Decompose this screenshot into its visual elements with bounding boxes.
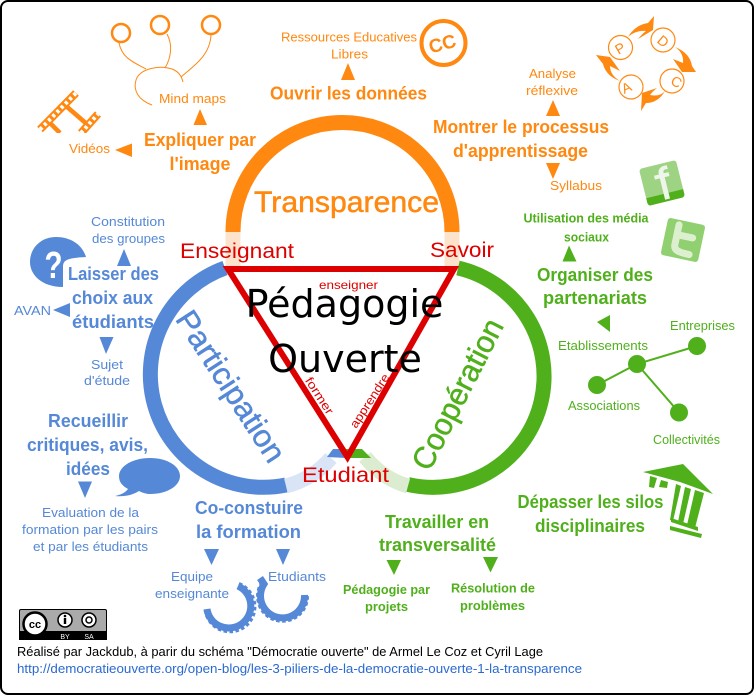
- heading: Organiser des partenariats: partenariats: [543, 288, 647, 308]
- credit text: Réalisé par Jackdub, à parir du schéma "Démocratie ouverte" de Armel Le Coz et Cyril Lage: [17, 645, 543, 659]
- text: Constitution des groupes: Constitution: [91, 215, 165, 229]
- heading: Dépasser les silos disciplinaires: [518, 492, 664, 536]
- title: Pédagogie Ouverte: [246, 282, 443, 381]
- icon: twitter: [660, 217, 706, 263]
- text: Ressources Educatives Libres: Libres: [331, 48, 368, 62]
- icon: speech bubble: [115, 458, 180, 496]
- red triangle: [228, 269, 454, 457]
- text: Evaluation de la formation: formation par les pairs: [22, 523, 158, 537]
- pillar heading: Transparence: Transparence: [254, 186, 439, 219]
- icon: facebook: [639, 160, 685, 206]
- triangle edge labels: enseigner: [319, 278, 378, 292]
- triangle vertex labels: [180, 239, 494, 487]
- pillar heading: Participation: Participation: [169, 304, 293, 469]
- text: Syllabus: Syllabus: [550, 179, 602, 193]
- arrow: to sujet: [100, 337, 114, 354]
- badge: CC BY-SA: SA: [84, 634, 94, 641]
- text: Utilisation des média sociaux: sociaux: [564, 230, 609, 244]
- arrow: to analyse: [546, 100, 560, 116]
- ring: transparence arc: [233, 122, 452, 267]
- arrow: to ressources: [341, 63, 355, 80]
- heading: Co-construire la formation: Co-constuire: [195, 498, 303, 518]
- icon: PDCA cycle: P: [612, 39, 628, 57]
- ring: participation arc: [150, 268, 346, 487]
- heading: Organiser des partenariats: [537, 265, 653, 308]
- text: Pédagogie par projets: Pédagogie par: [343, 583, 430, 597]
- text: Sujet d'étude: [84, 358, 130, 388]
- arrows: to equipe and etudiants: [204, 549, 290, 565]
- text: Pédagogie par projets: [343, 583, 430, 614]
- text: Evaluation de la formation: et par les étudiants: [33, 540, 148, 554]
- arrow: to syllabus: [546, 163, 560, 179]
- heading: Travailler en transversalité: transversalité: [379, 535, 496, 555]
- text: Utilisation des média sociaux: [524, 212, 650, 244]
- text: Ressources Educatives Libres: Ressources Educatives: [281, 30, 417, 44]
- arrow: to media: [562, 246, 576, 262]
- network diagram: [558, 319, 735, 447]
- title: Pédagogie Ouverte: Ouverte: [268, 337, 422, 381]
- text: Sujet d'étude: Sujet: [91, 358, 124, 372]
- arrow: to AVAN: [53, 303, 70, 317]
- arrow: to mind maps: [194, 109, 207, 125]
- heading: Expliquer par l'image: l'image: [170, 154, 230, 174]
- icon: PDCA cycle: C: [668, 72, 685, 91]
- icon: PDCA cycle: A: [619, 78, 635, 97]
- heading: Dépasser les silos disciplinaires: disciplinaires: [535, 516, 645, 536]
- triangle vertex labels: Savoir: [430, 239, 494, 262]
- arrow: to videos: [115, 144, 132, 157]
- icon: creative commons: CC: [427, 31, 459, 58]
- heading: Co-construire la formation: la formation: [196, 522, 301, 542]
- heading: Travailler en transversalité: [379, 512, 496, 555]
- text: Résolution de problèmes: problèmes: [460, 599, 525, 613]
- network diagram: Collectivités: [653, 433, 720, 447]
- triangle edge labels: [302, 278, 393, 431]
- title: Pédagogie Ouverte: Pédagogie: [246, 282, 443, 326]
- text: Ressources Educatives Libres: [281, 30, 417, 62]
- heading: Recueillir critiques, avis, idées: [27, 411, 148, 479]
- triangle vertex labels: Enseignant: [180, 240, 294, 263]
- icon: PDCA cycle: D: [654, 32, 672, 51]
- heading: Travailler en transversalité: Travailler en: [385, 512, 489, 532]
- heading: Recueillir critiques, avis, idées: Recueillir: [48, 411, 128, 431]
- badge: CC BY-SA: BY: [60, 634, 70, 641]
- triangle edge labels: apprendre: [347, 371, 393, 431]
- text: Equipe enseignante: [155, 570, 229, 601]
- arrow: to constitution: [117, 249, 131, 266]
- text: Résolution de problèmes: [451, 582, 535, 613]
- pillar heading: Coopération: Coopération: [405, 313, 511, 476]
- ring: cooperation arc: [346, 268, 544, 487]
- text: Analyse réflexive: réflexive: [526, 84, 578, 98]
- text: Constitution des groupes: des groupes: [92, 232, 165, 246]
- heading: Laisser des choix aux étudiants: étudiants: [72, 312, 154, 332]
- network diagram: Etablissements: [558, 339, 648, 353]
- arrow: to evaluation: [78, 482, 92, 498]
- text: Pédagogie par projets: projets: [365, 600, 408, 614]
- text: Vidéos: Vidéos: [69, 142, 110, 156]
- heading: Recueillir critiques, avis, idées: idées: [66, 459, 110, 479]
- icon: question bubble: ?: [44, 245, 62, 287]
- text: Evaluation de la formation: Evaluation de la: [42, 506, 139, 520]
- heading: Organiser des partenariats: Organiser des: [537, 265, 653, 285]
- heading: Laisser des choix aux étudiants: choix aux: [72, 288, 153, 308]
- icon: PDCA cycle: [596, 16, 696, 111]
- source link text: http://democratieouverte.org/open-blog/les-3-piliers-de-la-democratie-ouverte-1-la-transparence: [17, 662, 582, 676]
- network diagram: Associations: [568, 399, 640, 413]
- text: Analyse réflexive: [526, 67, 578, 98]
- heading: Expliquer par l'image: [144, 130, 256, 174]
- heading: Montrer le processus d'apprentissage: Montrer le processus: [433, 117, 609, 137]
- triangle vertex labels: Etudiant: [302, 464, 389, 487]
- text: Equipe enseignante: Equipe: [171, 570, 213, 584]
- heading: Montrer le processus d'apprentissage: [433, 117, 609, 161]
- heading: Laisser des choix aux étudiants: Laisser des: [68, 264, 159, 284]
- arrow: to etablissements: [597, 315, 610, 332]
- arrows: to pedagogie par projets and resolution: [386, 557, 498, 575]
- text: Utilisation des média sociaux: Utilisation des média: [524, 212, 650, 226]
- icon: mind map: [112, 16, 220, 105]
- icon: temple: [643, 464, 713, 538]
- icon: creative commons: [422, 21, 466, 65]
- text: Etudiants: Etudiants: [268, 570, 326, 584]
- icon: film strip: [30, 93, 110, 139]
- badge: CC BY-SA: [19, 610, 107, 641]
- badge: CC BY-SA: cc: [29, 619, 41, 631]
- heading: Laisser des choix aux étudiants: [68, 264, 159, 332]
- heading: Expliquer par l'image: Expliquer par: [144, 130, 256, 150]
- heading: Ouvrir les données: Ouvrir les données: [270, 84, 427, 104]
- text: Mind maps: Mind maps: [159, 92, 226, 106]
- heading: Co-construire la formation: [195, 498, 303, 542]
- heading: Montrer le processus d'apprentissage: d'apprentissage: [453, 141, 588, 161]
- icon: question bubble: [30, 237, 86, 287]
- network diagram: Entreprises: [670, 319, 735, 333]
- text: Evaluation de la formation: [22, 506, 158, 554]
- text: Résolution de problèmes: Résolution de: [451, 582, 535, 596]
- heading: Dépasser les silos disciplinaires: Dépasser les silos: [518, 492, 664, 512]
- icon: gears: [205, 578, 308, 632]
- text: Equipe enseignante: enseignante: [155, 587, 229, 601]
- text: Constitution des groupes: [91, 215, 165, 246]
- text: Sujet d'étude: d'étude: [84, 374, 130, 388]
- text: AVAN: AVAN: [14, 304, 51, 318]
- text: Analyse réflexive: Analyse: [529, 67, 576, 81]
- triangle edge labels: former: [302, 374, 337, 417]
- heading: Recueillir critiques, avis, idées: critiques, avis,: [27, 435, 148, 455]
